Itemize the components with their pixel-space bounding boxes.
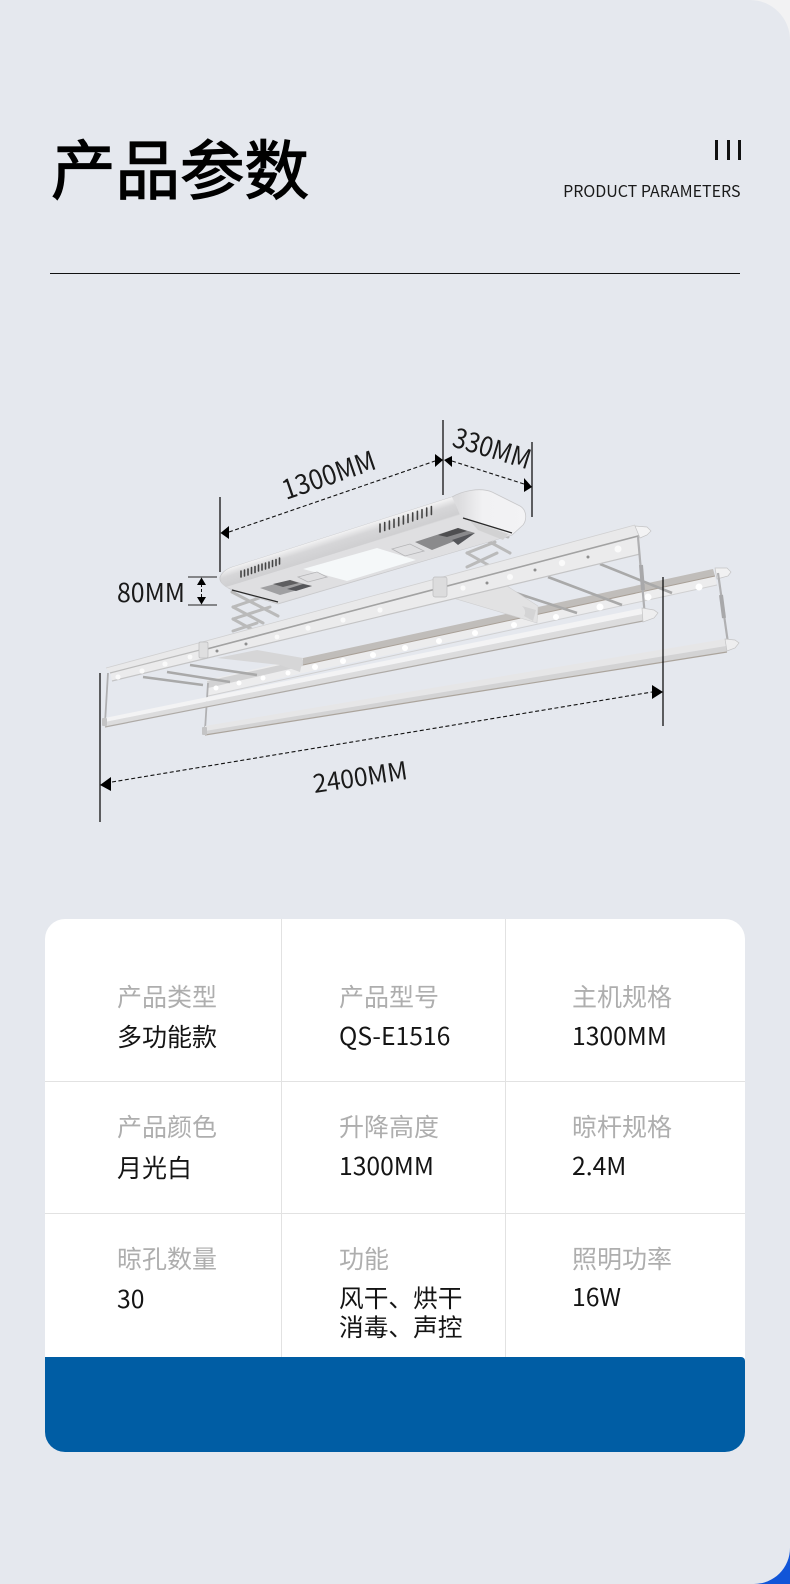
side band shading (221, 497, 460, 587)
cell: rod size: 晾杆规格 (572, 1108, 672, 1144)
dimension: 330MM: 330MM (449, 416, 537, 477)
vents (241, 506, 431, 577)
cell: functions (339, 1240, 462, 1344)
cell: lifting height (339, 1108, 439, 1183)
cell: lifting height: 升降高度 (339, 1108, 439, 1144)
dimension: 2400MM (100, 577, 663, 822)
end slot hardware (470, 521, 508, 540)
dimension: 1300MM (220, 439, 443, 572)
cell: hole count: 30 (117, 1280, 144, 1316)
hanger rods (105, 537, 728, 730)
dimension: 80MM: 80MM (117, 573, 185, 610)
control buttons (298, 544, 424, 582)
cell: functions: 功能 (339, 1240, 389, 1276)
dimension: 330MM (443, 416, 537, 517)
end slots (232, 518, 512, 602)
cell: hole count (117, 1240, 217, 1316)
cell: product model: 产品型号 (339, 978, 439, 1014)
mounting bracket (217, 586, 538, 672)
lighting panel (303, 548, 416, 581)
rear rack assembly (207, 568, 731, 696)
cell: host size: 1300MM (572, 1017, 667, 1053)
cell: lighting power: 照明功率 (572, 1240, 672, 1276)
cell: rod size (572, 1108, 672, 1183)
cell: product type: 多功能款 (117, 1018, 217, 1054)
cell: lighting power (572, 1240, 672, 1314)
cell: rod size: 2.4M (572, 1147, 626, 1183)
subtitle: product parameters: PRODUCT PARAMETERS (563, 178, 740, 202)
underside panel (226, 515, 512, 603)
cell: product type (117, 978, 217, 1054)
rear lower bar (202, 639, 739, 735)
cell: product colour (117, 1108, 217, 1185)
dimension: 2400MM: 2400MM (310, 751, 410, 801)
front lower bar (102, 608, 658, 727)
grille right (415, 528, 475, 550)
cell: hole count: 晾孔数量 (117, 1240, 217, 1276)
grille left (260, 580, 312, 595)
cell: host size: 主机规格 (572, 978, 672, 1014)
cell: functions: 消毒、声控 (339, 1308, 462, 1344)
cell: product model (339, 978, 450, 1053)
cell: lifting height: 1300MM (339, 1147, 434, 1183)
cell: product colour: 月光白 (117, 1149, 192, 1185)
cell: product model: QS-E1516 (339, 1017, 450, 1053)
cross bars (143, 564, 672, 685)
blue footer band (45, 1357, 745, 1452)
cell: lighting power: 16W (572, 1278, 621, 1314)
main rack rail with hanging holes (106, 525, 651, 681)
cell: product type: 产品类型 (117, 978, 217, 1014)
parameter table (45, 919, 745, 1452)
icon: three vertical bars (715, 140, 741, 160)
dimension: 1300MM: 1300MM (276, 439, 380, 508)
cell: host size (572, 978, 672, 1053)
scissor arm left (232, 592, 278, 631)
scissor arm right (465, 520, 510, 567)
main unit housing (220, 490, 526, 604)
cell: functions: 风干、烘干 (339, 1279, 462, 1315)
title: 产品参数 (51, 119, 309, 213)
cell: product colour: 产品颜色 (117, 1108, 217, 1144)
